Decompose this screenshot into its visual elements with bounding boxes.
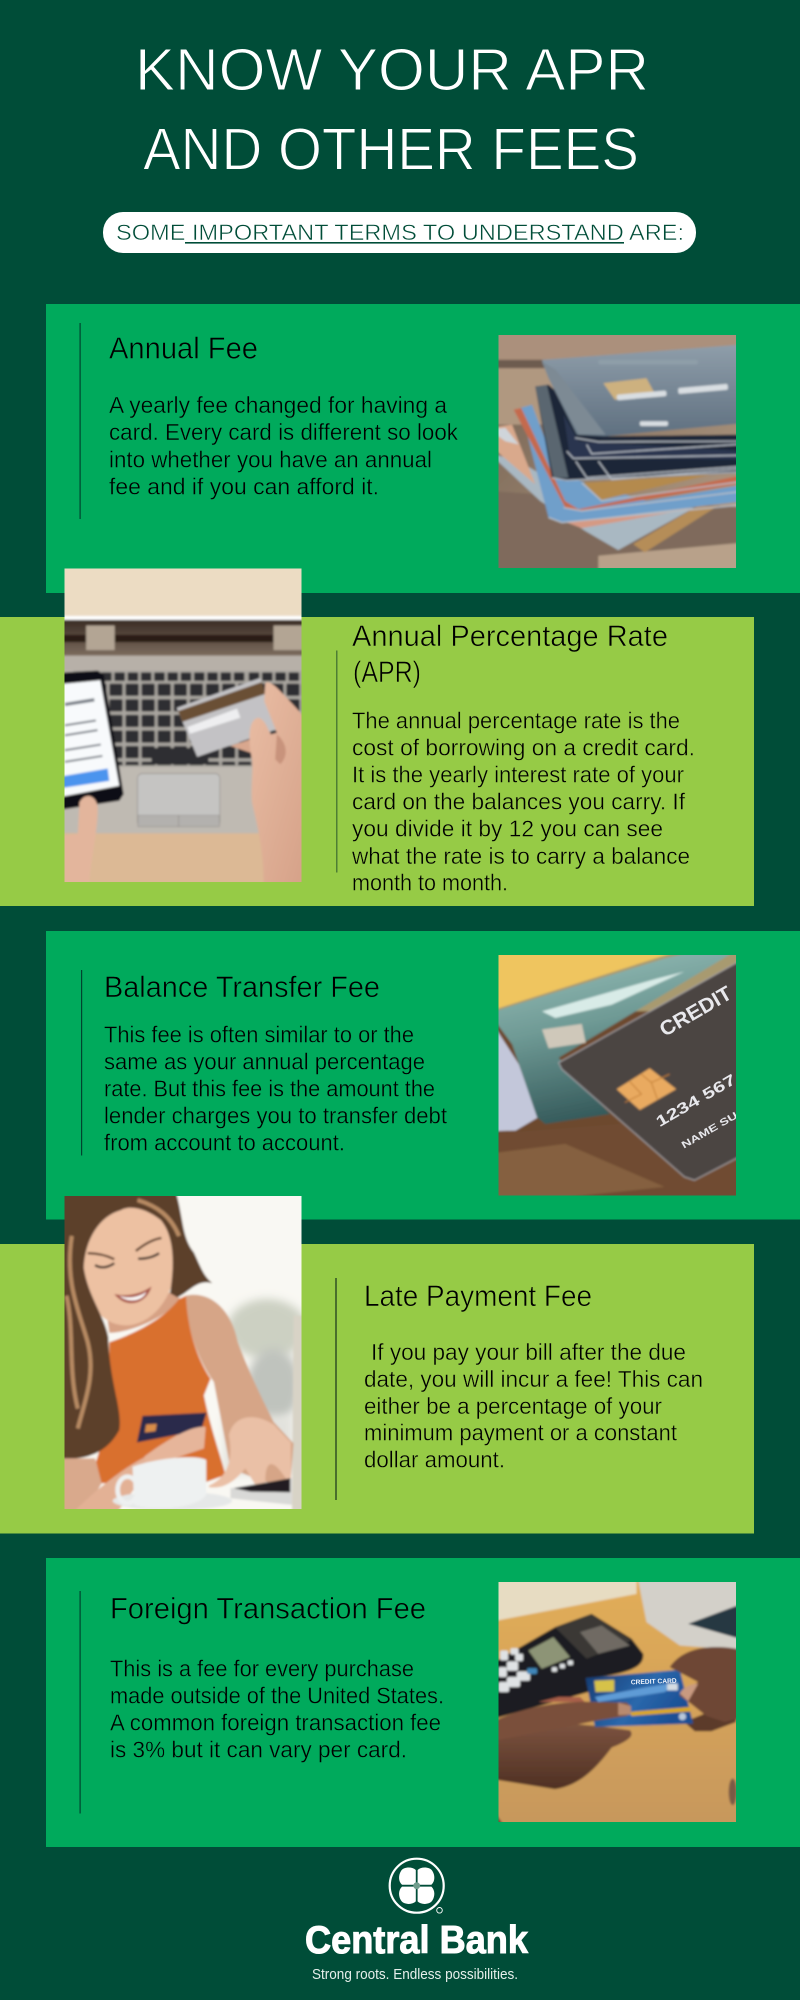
heading: foreign transaction fee: Foreign Transaction Fee xyxy=(110,1592,426,1626)
heading: late payment fee: Late Payment Fee xyxy=(364,1280,592,1313)
heading: annual fee: Annual Fee xyxy=(109,330,258,366)
text: late payment description: minimum payment or a constant xyxy=(364,1420,678,1446)
card lettering: 1234 567 xyxy=(653,1071,739,1131)
text: balance transfer description: lender charges you to transfer debt xyxy=(104,1102,448,1128)
text: late payment description: either be a percentage of your xyxy=(364,1393,662,1419)
text: APR description: month to month. xyxy=(352,870,508,896)
text: late payment description: If you pay your bill after the due xyxy=(371,1339,686,1365)
text: APR description: It is the yearly interest rate of your xyxy=(352,762,684,788)
photo: laptop, phone and card xyxy=(64,568,302,882)
panel: late payment fee xyxy=(0,1186,754,1534)
title: AND OTHER FEES xyxy=(143,116,639,182)
subtitle pill xyxy=(103,212,696,253)
panel: annual percentage rate xyxy=(0,559,754,906)
text: APR description xyxy=(351,708,695,896)
text: APR description: card on the balances you carry. If xyxy=(352,788,686,814)
text: APR description: cost of borrowing on a credit card. xyxy=(352,734,695,760)
photo: stack of credit cards xyxy=(498,335,736,568)
text: balance transfer description: same as your annual percentage xyxy=(104,1048,425,1074)
text: late payment description xyxy=(364,1339,703,1472)
card lettering: CREDIT CARD xyxy=(631,1678,677,1686)
card lettering: CREDIT xyxy=(656,982,736,1041)
text: balance transfer description: This fee is often similar to or the xyxy=(104,1022,414,1048)
title: KNOW YOUR APR xyxy=(135,37,649,103)
heading: annual percentage rate: Annual Percentage Rate xyxy=(352,620,668,653)
text: foreign transaction description: A common foreign transaction fee xyxy=(110,1710,441,1736)
text: APR description: you divide it by 12 you can see xyxy=(352,816,663,842)
text: foreign transaction description: is 3% but it can vary per card. xyxy=(110,1736,407,1762)
text: late payment description: dollar amount. xyxy=(364,1446,505,1472)
text: balance transfer description: from account to account. xyxy=(104,1130,345,1156)
text: annual fee description: into whether you have an annual xyxy=(109,446,432,472)
text: annual fee description: card. Every card is different so look xyxy=(109,419,458,445)
text: APR description: what the rate is to carry a balance xyxy=(351,843,690,869)
text: APR description: The annual percentage rate is the xyxy=(352,708,680,734)
heading: balance transfer fee: Balance Transfer Fee xyxy=(104,971,380,1004)
text: annual fee description: A yearly fee changed for having a xyxy=(109,392,447,418)
text: annual fee description xyxy=(109,392,458,500)
panel: balance transfer fee xyxy=(46,931,800,1220)
photo: woman with credit card xyxy=(64,1196,302,1509)
text: foreign transaction description xyxy=(110,1656,444,1762)
subtitle pill: SOME IMPORTANT TERMS TO UNDERSTAND ARE: xyxy=(116,220,684,245)
card lettering xyxy=(653,982,740,1151)
photo: credit cards on wood xyxy=(498,955,740,1196)
text: annual fee description: fee and if you can afford it. xyxy=(109,474,379,500)
logo: Central Bank xyxy=(305,1859,529,1983)
panel: foreign transaction fee xyxy=(46,1558,800,1847)
photo: card handed over a payment terminal xyxy=(498,1582,736,1822)
heading: annual percentage rate: (APR) xyxy=(353,656,421,689)
wordmark: Central Bank xyxy=(305,1919,529,1962)
text: late payment description: date, you will incur a fee! This can xyxy=(364,1366,703,1392)
text: balance transfer description xyxy=(104,1022,448,1156)
card lettering: NAME SU xyxy=(680,1110,740,1151)
panel: annual fee xyxy=(46,304,800,593)
text: foreign transaction description: made outside of the United States. xyxy=(110,1682,444,1708)
heading: annual percentage rate xyxy=(352,620,668,689)
text: foreign transaction description: This is a fee for every purchase xyxy=(110,1656,414,1682)
icon: clover emblem xyxy=(390,1859,444,1913)
title xyxy=(135,37,649,182)
tagline: Strong roots. Endless possibilities. xyxy=(312,1966,518,1983)
text: balance transfer description: rate. But this fee is the amount the xyxy=(104,1076,435,1102)
